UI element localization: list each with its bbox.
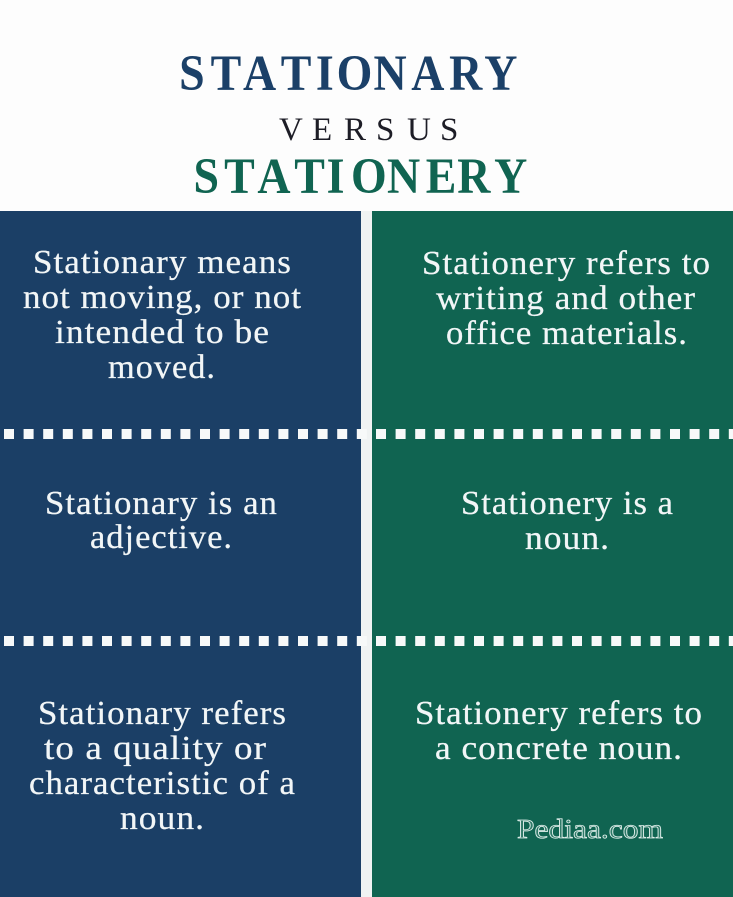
text: stationery part of speech: Stationery is a <box>461 485 674 522</box>
text: stationery part of speech: noun. <box>525 520 610 557</box>
text: stationery part of speech <box>461 485 674 557</box>
text: stationery meaning: writing and other <box>436 280 696 317</box>
panel: stationary column <box>0 211 361 897</box>
text: stationery meaning: office materials. <box>446 315 688 352</box>
text: stationery meaning <box>422 245 711 352</box>
dotted divider: upper <box>4 429 733 439</box>
dotted divider: lower <box>4 636 733 646</box>
text: stationary usage: to a quality or <box>44 730 267 767</box>
panel: stationery column <box>372 211 733 897</box>
text: stationary part of speech <box>45 485 278 556</box>
logo: Pediaa.com: Pediaa.com <box>517 814 663 844</box>
title <box>179 46 527 205</box>
text: stationary part of speech: adjective. <box>90 519 233 556</box>
text: stationery usage: Stationery refers to <box>415 695 703 732</box>
heading: versus: VERSUS <box>279 112 458 148</box>
text: stationary meaning <box>23 244 302 386</box>
heading: stationery: STATIONERY <box>194 149 527 205</box>
text: stationary usage: characteristic of a <box>29 765 296 802</box>
text: stationary part of speech: Stationary is an <box>45 485 278 522</box>
text: stationary usage: noun. <box>120 800 205 837</box>
text: stationary usage <box>29 695 296 837</box>
text: stationary usage: Stationary refers <box>38 695 287 732</box>
text: stationery meaning: Stationery refers to <box>422 245 711 282</box>
text: stationary meaning: intended to be <box>55 314 270 351</box>
text: stationary meaning: Stationary means <box>33 244 292 281</box>
text: stationary meaning: moved. <box>108 349 216 386</box>
text: stationery usage <box>415 695 703 767</box>
heading: stationary: STATIONARY <box>179 46 517 102</box>
text: stationary meaning: not moving, or not <box>23 279 302 316</box>
text: stationery usage: a concrete noun. <box>435 730 683 767</box>
